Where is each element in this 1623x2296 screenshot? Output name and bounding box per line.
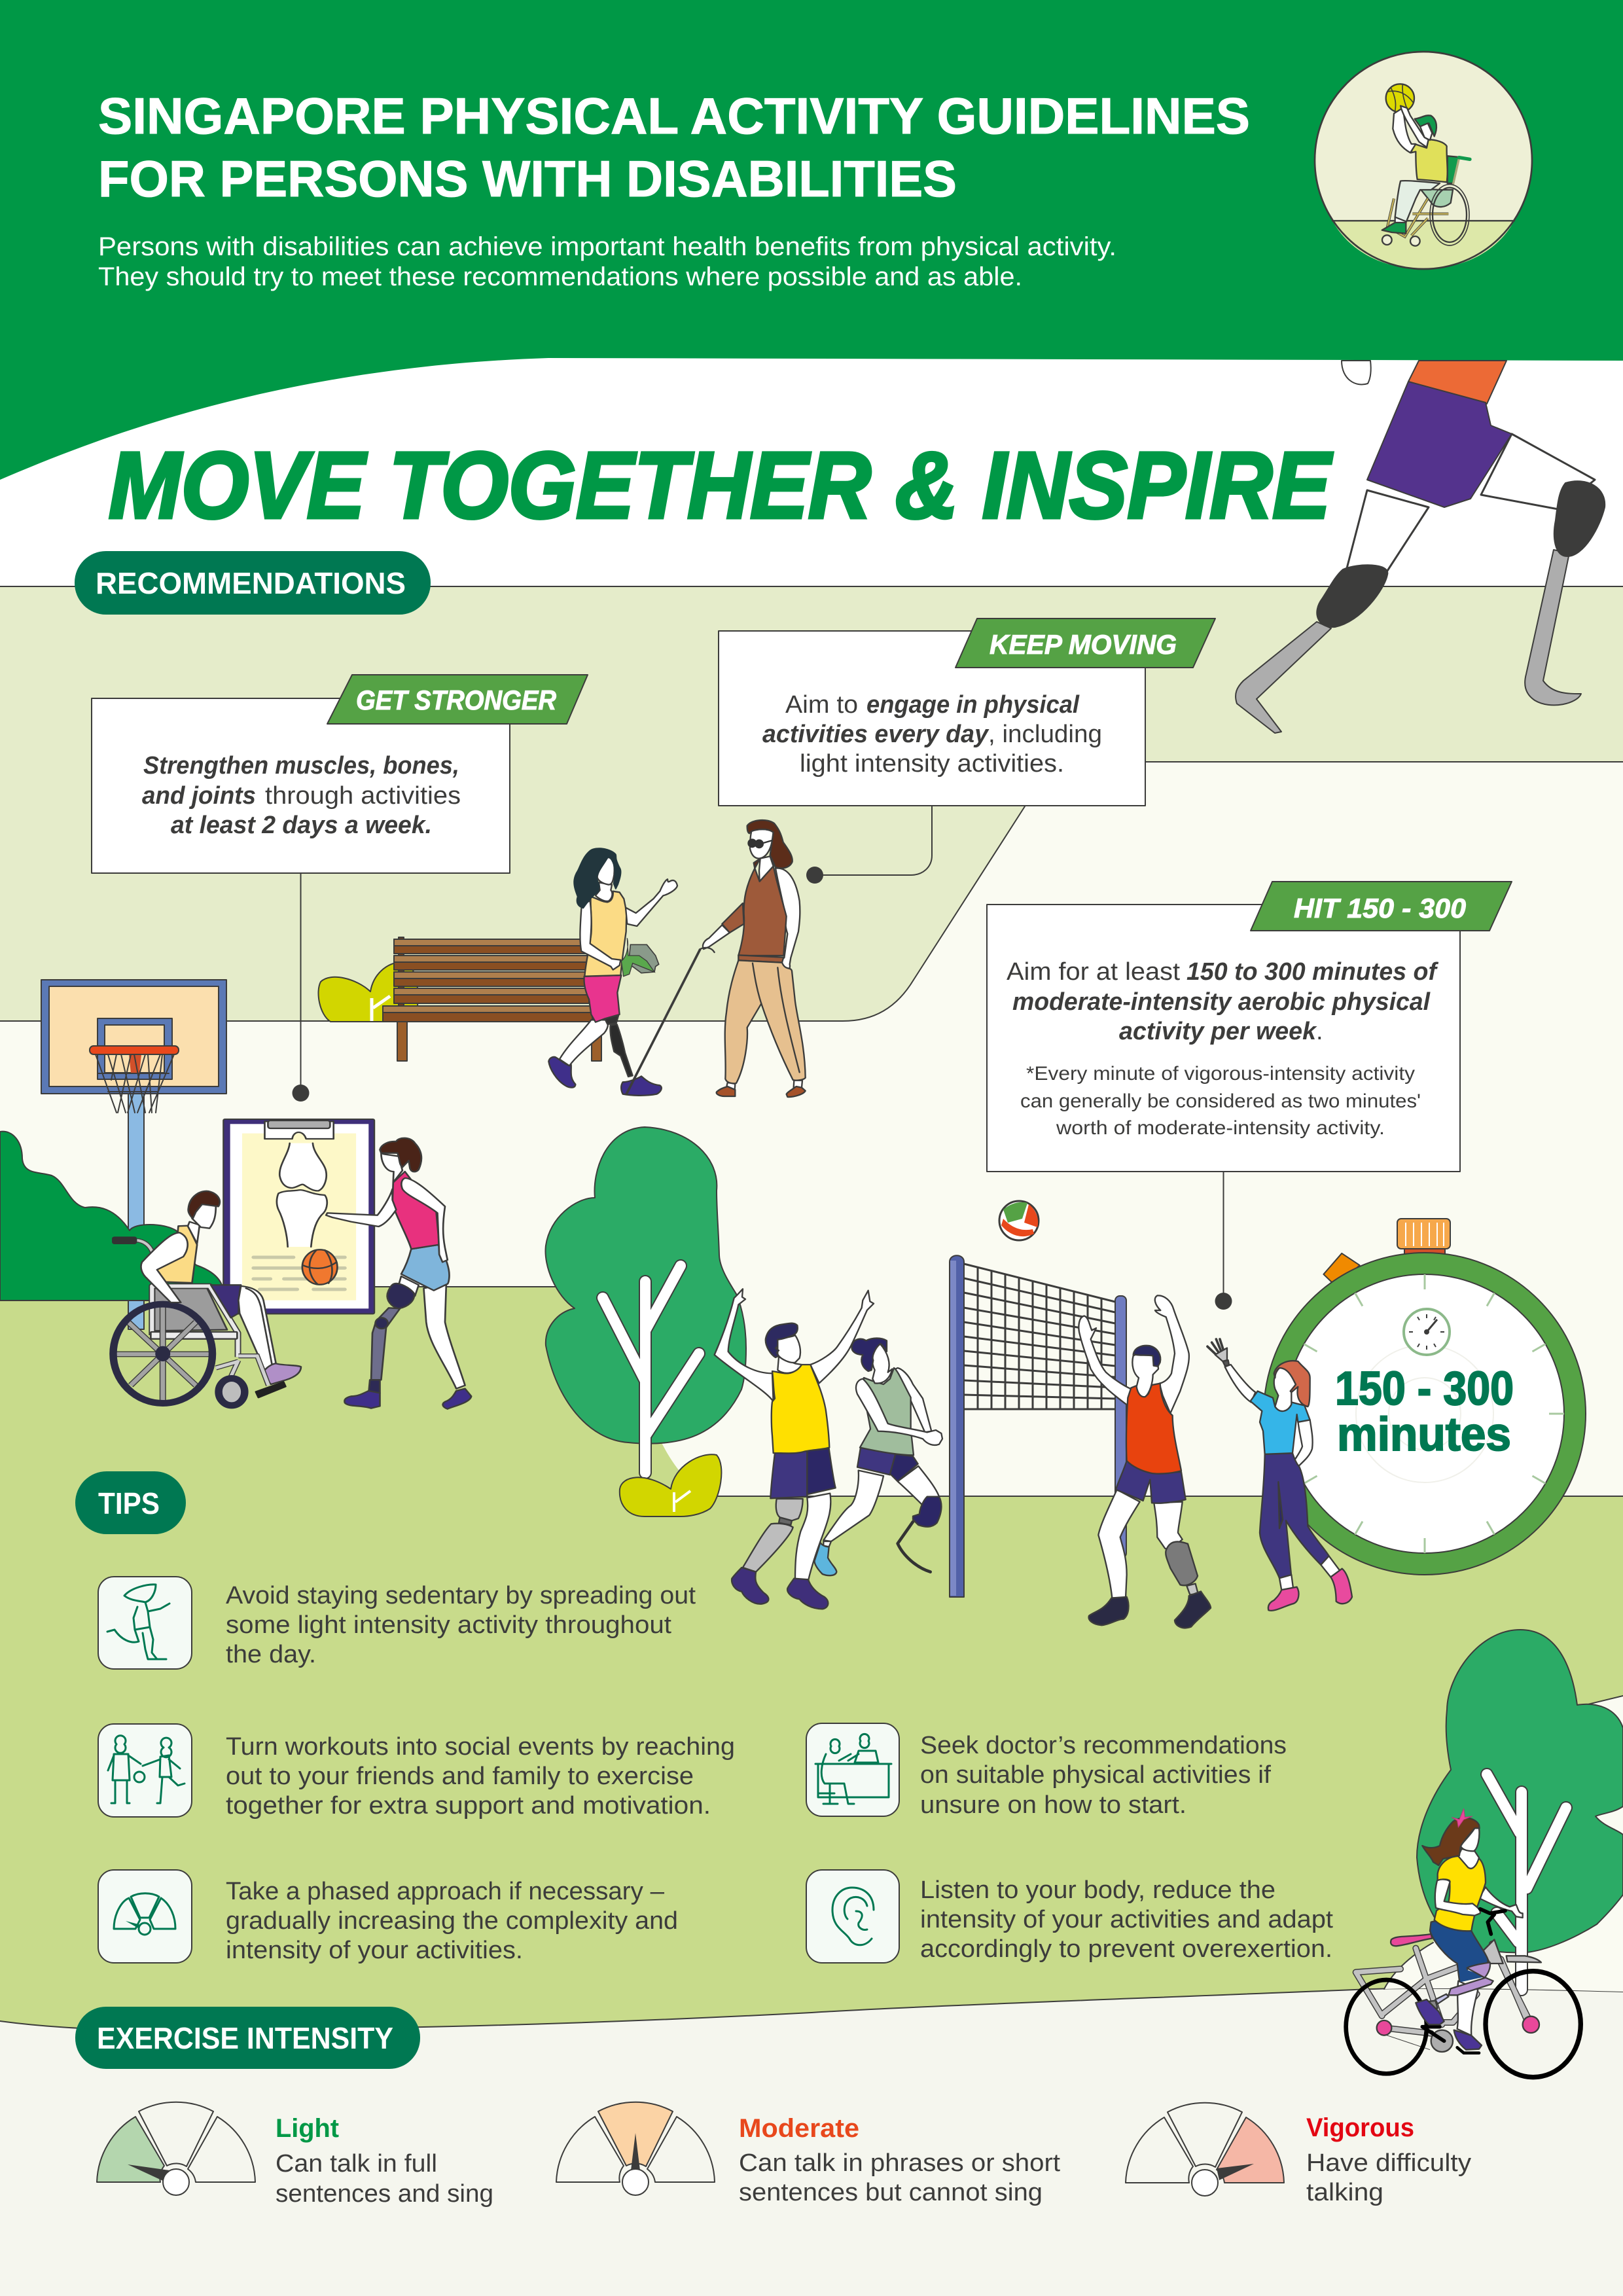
label: moderate: sentences but cannot sing <box>739 2179 1043 2206</box>
tip text 1: the day. <box>226 1641 316 1668</box>
callout: hit 150 to 300: HIT 150 - 300 <box>1294 893 1466 924</box>
tip text 2 <box>226 1733 735 1820</box>
header intro text: They should try to meet these recommendations where possible and as able. <box>98 262 1022 291</box>
tip text 4: Seek doctor’s recommendations <box>920 1732 1287 1759</box>
tip: phased approach <box>98 1870 678 1964</box>
label: vigorous: Have difficulty <box>1306 2149 1471 2177</box>
tip text 2: Turn workouts into social events by reaching <box>226 1733 735 1761</box>
label: vigorous: talking <box>1306 2179 1383 2206</box>
illustration: park bench <box>383 937 601 1061</box>
illustration: player in orange top with prosthetic leg <box>1079 1295 1211 1628</box>
icon: small clock face <box>1404 1309 1450 1355</box>
illustration: volleyball <box>999 1201 1039 1240</box>
header title: FOR PERSONS WITH DISABILITIES <box>98 150 957 207</box>
gauge: vigorous <box>1126 2103 1284 2196</box>
icon: gauge <box>98 1870 192 1963</box>
tip: spread light activity <box>98 1577 696 1669</box>
illustration: dark green bushes <box>0 1132 223 1300</box>
tip text 3: intensity of your activities. <box>226 1937 523 1964</box>
tip text 1: some light intensity activity throughout <box>226 1611 671 1639</box>
lower panel edge line <box>0 1988 1623 2031</box>
label: vigorous <box>1306 2113 1471 2206</box>
callout: get stronger: at least 2 days a week. <box>171 812 432 839</box>
pale green upper park band <box>0 586 1623 1021</box>
recommendations heading pill <box>75 551 431 615</box>
illustration: volleyball net <box>950 1255 1126 1597</box>
callout: hit 150 to 300: can generally be considered as two minutes' <box>1020 1090 1421 1112</box>
connector: get stronger to illustration <box>292 873 309 1102</box>
pale park band <box>0 762 1623 1496</box>
illustration: player in blue top with prosthetic hand <box>1207 1339 1352 1611</box>
tip text 4: on suitable physical activities if <box>920 1761 1271 1789</box>
callout: hit 150 to 300: activity per week <box>1119 1018 1317 1045</box>
callout: hit 150 to 300: . <box>1316 1018 1323 1045</box>
label: light <box>276 2114 493 2208</box>
illustration: large tree with yellow bush <box>545 1127 746 1516</box>
gauge: moderate <box>556 2102 715 2195</box>
tip text 4 <box>920 1732 1287 1819</box>
icon: ear <box>806 1870 899 1963</box>
connector: keep moving to illustration <box>806 806 932 884</box>
illustration: woman with cane and dark glasses <box>700 820 806 1097</box>
callout: hit 150 to 300 <box>987 882 1512 1172</box>
icon: wheelchair basketball player in circle <box>1315 52 1532 269</box>
callout: keep moving: engage in physical <box>866 691 1080 719</box>
header intro text: Persons with disabilities can achieve important health benefits from physical activity. <box>98 232 1116 261</box>
intensity: light <box>97 2102 493 2208</box>
callout: keep moving: activities every day <box>762 721 990 748</box>
callout: keep moving: KEEP MOVING <box>990 629 1177 660</box>
label: light: sentences and sing <box>276 2180 493 2208</box>
tip: listen to your body <box>806 1870 1333 1963</box>
callout: keep moving: light intensity activities. <box>800 750 1064 778</box>
horizon lines <box>0 586 1623 1021</box>
callout: hit 150 to 300: worth of moderate-intensity activity. <box>1056 1117 1385 1139</box>
tips heading pill <box>75 1471 186 1534</box>
label: vigorous: Vigorous <box>1306 2113 1414 2142</box>
tip text 1: Avoid staying sedentary by spreading out <box>226 1582 696 1609</box>
illustration: right tree <box>1417 1630 1623 1990</box>
illustration: stopwatch <box>1264 1219 1586 1575</box>
tip text 5: accordingly to prevent overexertion. <box>920 1935 1332 1963</box>
tip text 5 <box>920 1876 1333 1963</box>
callout: keep moving <box>719 619 1215 806</box>
tip text 5: intensity of your activities and adapt <box>920 1906 1333 1933</box>
callout: hit 150 to 300: Aim for at least <box>1007 958 1180 986</box>
illustration: man in wheelchair <box>111 1191 301 1405</box>
callout: hit 150 to 300: moderate-intensity aerobic physical <box>1012 988 1431 1016</box>
illustration: woman with leg prosthesis walking <box>548 848 700 1096</box>
callout: get stronger: GET STRONGER <box>356 685 557 715</box>
tip text 4: unsure on how to start. <box>920 1791 1186 1819</box>
illustration: player in green top with blade <box>815 1338 942 1575</box>
illustration: yellow bush behind bench <box>318 962 418 1022</box>
tip text 3: Take a phased approach if necessary – <box>226 1878 665 1905</box>
exercise intensity heading pill <box>75 2007 420 2069</box>
header band <box>0 0 1623 480</box>
label: light: Can talk in full <box>276 2150 437 2178</box>
label: moderate: Can talk in phrases or short <box>739 2149 1060 2177</box>
tips heading pill: TIPS <box>98 1486 160 1520</box>
ground lines <box>223 1287 1623 1496</box>
pale wedge behind right tree <box>1384 1696 1623 1992</box>
tip text 2: together for extra support and motivation. <box>226 1792 711 1820</box>
tip: seek doctor <box>806 1723 1287 1819</box>
callout: get stronger: through activities <box>265 782 461 810</box>
callout: hit 150 to 300: 150 to 300 minutes of <box>1186 958 1438 986</box>
gauge: light <box>97 2102 255 2195</box>
callout: hit 150 to 300: *Every minute of vigorous-intensity activity <box>1026 1063 1415 1085</box>
lower pale panel <box>0 1988 1623 2296</box>
illustration: backboard and hoop <box>41 980 226 1329</box>
green ground <box>0 1287 1623 2031</box>
stopwatch label: minutes <box>1337 1408 1511 1461</box>
intensity: moderate <box>556 2102 1060 2206</box>
icon: doctor and patient <box>806 1723 899 1816</box>
callout: get stronger: and joints <box>142 782 256 810</box>
tip: social workouts <box>98 1724 735 1820</box>
callout: keep moving: , including <box>988 721 1102 748</box>
label: light: Light <box>276 2114 339 2143</box>
header title: SINGAPORE PHYSICAL ACTIVITY GUIDELINES <box>98 87 1250 145</box>
illustration: player in yellow jersey <box>715 1289 874 1609</box>
illustration: knee joint clipboard <box>223 1119 374 1314</box>
callout: get stronger <box>92 675 588 873</box>
illustration: runner with blade prostheses <box>1236 361 1605 733</box>
big title: move together and inspire: MOVE TOGETHER & INSPIRE <box>109 433 1333 538</box>
label: moderate <box>739 2114 1060 2206</box>
stopwatch label <box>1335 1363 1514 1461</box>
tip text 1 <box>226 1582 696 1668</box>
icon: runner <box>98 1577 192 1669</box>
wedge edge lines <box>1384 1696 1623 1989</box>
tip text 5: Listen to your body, reduce the <box>920 1876 1275 1904</box>
tip text 3: gradually increasing the complexity and <box>226 1907 678 1935</box>
tip text 2: out to your friends and family to exercise <box>226 1763 694 1790</box>
header intro text <box>98 232 1116 291</box>
connector: hit 150 to stopwatch <box>1215 1172 1232 1310</box>
stopwatch label: 150 - 300 <box>1335 1363 1514 1415</box>
illustration: woman with prosthetic leg and basketball <box>326 1138 471 1409</box>
recommendations heading pill: RECOMMENDATIONS <box>96 566 406 600</box>
illustration: cyclist with leg prosthesis <box>1346 1808 1580 2077</box>
intensity: vigorous <box>1126 2103 1471 2206</box>
exercise intensity heading pill: EXERCISE INTENSITY <box>97 2021 393 2055</box>
icon: two friends with ball <box>98 1724 192 1817</box>
callout: keep moving: Aim to <box>785 691 858 719</box>
tip text 3 <box>226 1878 678 1964</box>
label: moderate: Moderate <box>739 2114 859 2143</box>
header title <box>98 87 1250 207</box>
bouquet <box>621 938 659 977</box>
callout: get stronger: Strengthen muscles, bones, <box>143 752 459 780</box>
